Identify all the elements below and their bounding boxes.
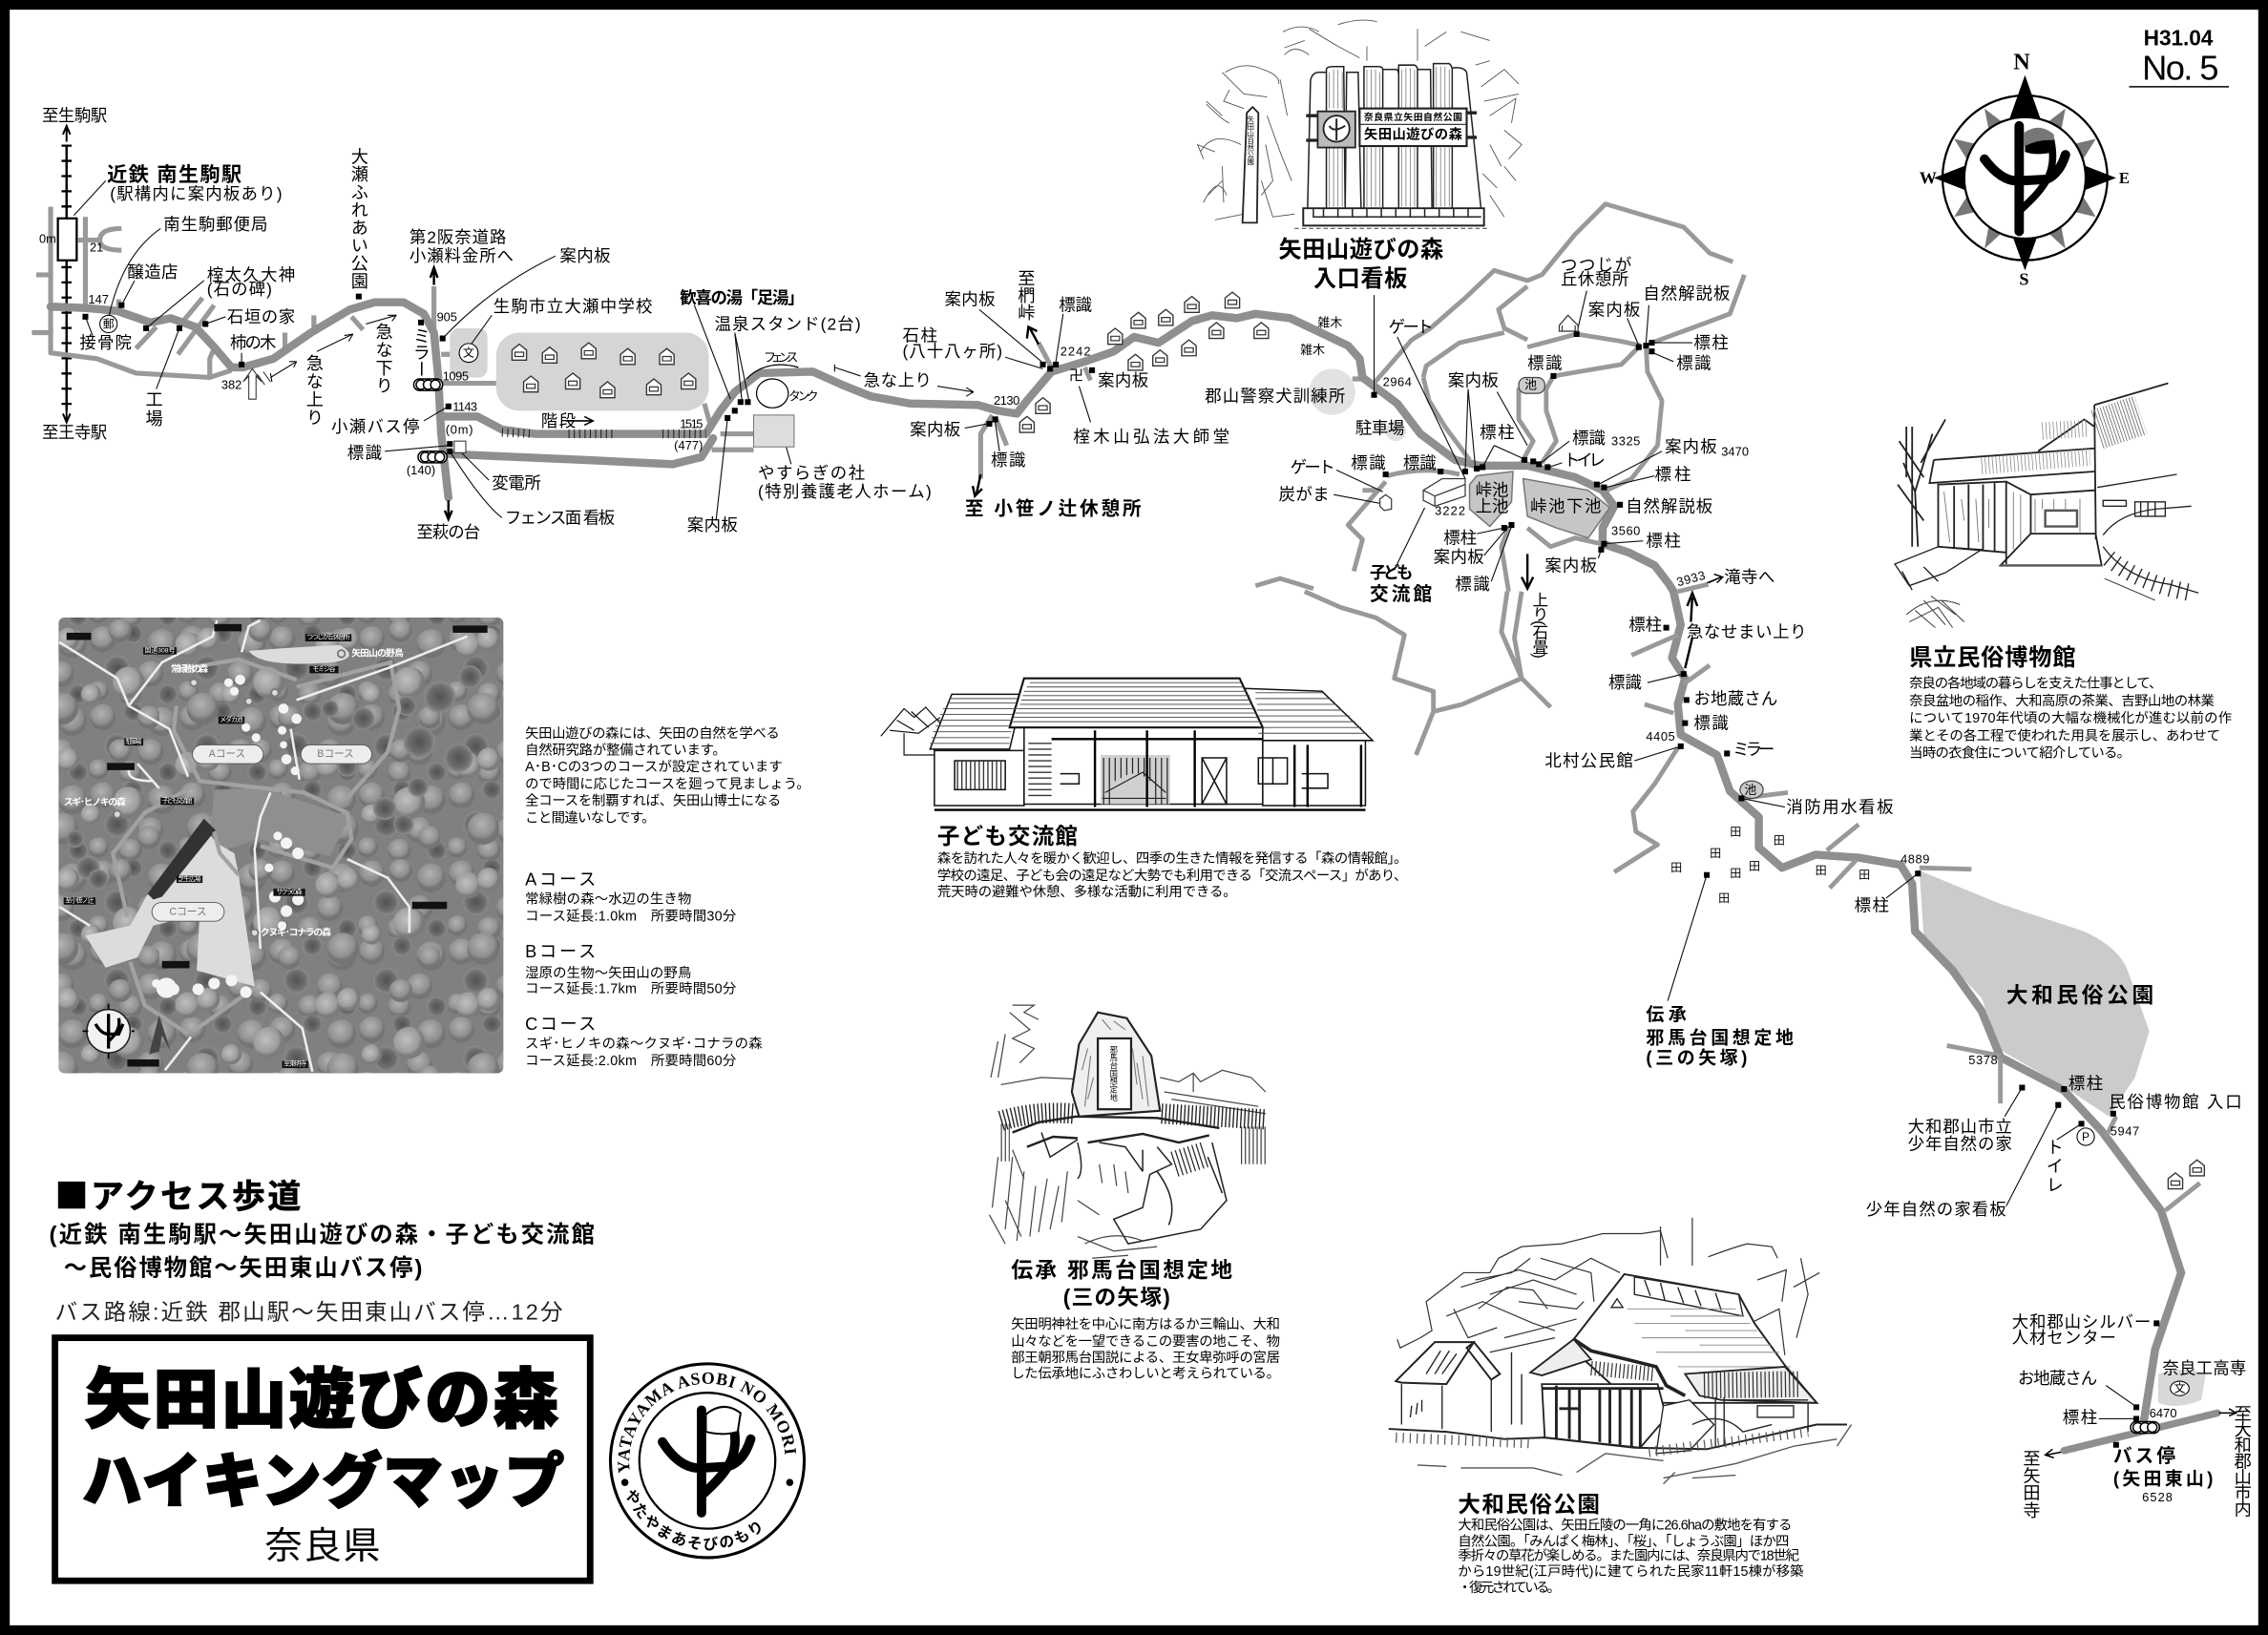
yamato park area bbox=[1920, 870, 2150, 1117]
paddy field symbols: 田 bbox=[1774, 833, 1785, 847]
course map panel: Bコース bbox=[317, 748, 354, 760]
map labels: lake and east section: 伝承 bbox=[1646, 1004, 1687, 1025]
map labels: lake and east section: 標柱 bbox=[1654, 465, 1690, 484]
map labels: west section bbox=[39, 106, 861, 542]
map labels: lake and east section: 3560 bbox=[1611, 524, 1640, 538]
map labels: lake and east section: 大和郡山市立 bbox=[1908, 1117, 2012, 1136]
map labels: lake and east section: 丘休憩所 bbox=[1561, 269, 1628, 288]
course map panel bbox=[58, 618, 503, 1073]
main hiking route bbox=[51, 303, 2217, 1451]
map labels: central section: 雑木 bbox=[1317, 315, 1342, 329]
map labels: west section: 至生駒駅 bbox=[42, 106, 107, 125]
map labels: central section: 標柱 bbox=[1480, 423, 1515, 442]
access route description: (近鉄 南生駒駅〜矢田山遊びの森・子ども交流館 bbox=[50, 1223, 595, 1248]
map labels: central section: 標識 bbox=[1351, 453, 1386, 472]
map labels: central section: 案内板 bbox=[910, 420, 960, 439]
route direction arrows bbox=[270, 267, 2236, 1457]
map labels: lake and east section: 標柱 bbox=[1628, 616, 1662, 635]
compass rose: W bbox=[1920, 168, 1937, 187]
text: forest introduction: A･B･Cの3つのコースが設定されています bbox=[525, 759, 783, 775]
course B: Bコース bbox=[525, 942, 596, 961]
text: Yamatai candidate site: 矢田明神社を中心に南方はるか三輪山、大和 bbox=[1011, 1316, 1280, 1332]
map labels: lake and east section: 標柱 bbox=[1693, 333, 1729, 352]
housing and school blobs bbox=[450, 328, 2206, 1406]
text: forest introduction: 自然研究路が整備されています。 bbox=[525, 742, 726, 758]
map labels: west section: 榁太久大神 bbox=[207, 265, 295, 284]
course map panel: 常緑樹の森 bbox=[171, 662, 208, 675]
map symbol letters bbox=[103, 317, 2186, 1395]
course map panel: メダカ池 bbox=[220, 715, 243, 723]
title box: 矢田山遊びの森 bbox=[85, 1364, 558, 1436]
map labels: west section: 382 bbox=[221, 378, 242, 392]
map labels: lake and east section: 3933 bbox=[1675, 568, 1707, 589]
compass rose: S bbox=[2019, 269, 2028, 288]
map labels: lake and east section: 標柱 bbox=[2063, 1408, 2097, 1427]
map labels: west section: 905 bbox=[437, 309, 457, 324]
text: forest introduction: 全コースを制覇すれば、矢田山博士になる bbox=[525, 792, 781, 808]
map labels: west section: フェンス面 看板 bbox=[505, 508, 615, 527]
course A: Aコース bbox=[525, 870, 596, 889]
text: Yamato folk park: 自然公園。「みんぱく梅林」、「桜」、「しょうぶ園」ほか四 bbox=[1458, 1533, 1789, 1549]
map symbol letters: 郵 bbox=[103, 317, 115, 330]
course B bbox=[525, 942, 737, 996]
paddy field symbols: 田 bbox=[1710, 847, 1721, 860]
text: Yamatai candidate site bbox=[1011, 1316, 1280, 1381]
text: children's exchange hall bbox=[937, 850, 1407, 900]
map labels: lake and east section: トイレ bbox=[1564, 451, 1606, 470]
text: Yamato folk park: 季折々の草花が楽しめる。また園内には、奈良県内で18世紀 bbox=[1458, 1547, 1799, 1563]
course A bbox=[525, 870, 737, 925]
map labels: lake and east section: 標柱 bbox=[1646, 532, 1681, 551]
title box: ハイキングマップ bbox=[82, 1449, 564, 1516]
round logo bbox=[609, 1362, 806, 1560]
map labels: lake and east section: 4405 bbox=[1646, 729, 1675, 744]
map labels: lake and east section: 案内板 bbox=[1665, 437, 1717, 456]
course map panel: 国道308号 bbox=[145, 645, 176, 654]
map labels: west section: 案内板 bbox=[559, 246, 610, 265]
heading: Yamatai candidate site: 伝承 邪馬台国想定地 bbox=[1011, 1257, 1232, 1282]
rest hut and charcoal kiln, shed bbox=[1380, 315, 1578, 511]
paddy field symbols bbox=[1670, 825, 1870, 905]
map labels: lake and east section: バス停 bbox=[2113, 1445, 2175, 1467]
map labels: west section: タンク bbox=[788, 389, 819, 404]
map labels: west section: 急な下り bbox=[374, 323, 393, 395]
text: Yamato folk park: ・復元されている。 bbox=[1458, 1580, 1561, 1596]
course map panel: 駐車場 bbox=[126, 737, 142, 745]
sketch: entrance sign of the forest bbox=[1198, 20, 1522, 228]
map labels: lake and east section: (三の矢塚) bbox=[1646, 1048, 1747, 1069]
text: children's exchange hall: 森を訪れた人々を暖かく歓迎し、四季の生きた情報を発信する「森の情報館」。 bbox=[937, 850, 1407, 867]
map labels: west section: フェンス bbox=[764, 350, 798, 365]
paddy field symbols: 田 bbox=[1749, 860, 1760, 873]
course C: Cコース bbox=[525, 1015, 596, 1034]
text: prefectural folk museum: 奈良盆地の稲作、大和高原の茶業、吉野山地の林業 bbox=[1909, 693, 2215, 709]
map labels: lake and east section: 3470 bbox=[1721, 444, 1749, 458]
map symbols: post, school, parking bbox=[100, 315, 2189, 1395]
map labels: lake and east section: 自然解説板 bbox=[1643, 284, 1730, 304]
map labels: lake and east section: 滝寺へ bbox=[1724, 568, 1774, 587]
map labels: central section: 案内板 bbox=[1448, 371, 1499, 390]
text: children's exchange hall: 学校の遠足、子ども会の遠足など大勢でも利用できる「交流スペース」があり、 bbox=[937, 868, 1407, 884]
map labels: lake and east section bbox=[1524, 255, 2252, 1519]
stair hatching on route bbox=[502, 432, 705, 434]
map labels: central section: 峠池 bbox=[1476, 481, 1508, 500]
course map panel: モミジ谷 bbox=[312, 664, 336, 673]
map labels: west section: 1095 bbox=[443, 368, 469, 383]
pond lower bbox=[1523, 479, 1610, 538]
course A: コース延長:1.0km 所要時間30分 bbox=[525, 909, 737, 925]
map labels: central section: 2130 bbox=[994, 393, 1019, 408]
map labels: west section: 標識 bbox=[347, 443, 382, 462]
text: prefectural folk museum: 奈良の各地域の暮らしを支えた仕事として、 bbox=[1909, 676, 2162, 692]
map labels: central section: 至椚峠 bbox=[1016, 269, 1035, 321]
course map panel: サクラの森 bbox=[276, 887, 303, 895]
map labels: central section: 3222 bbox=[1435, 503, 1465, 517]
map labels: lake and east section: 人材センター bbox=[2012, 1329, 2116, 1348]
map labels: lake and east section: 邪馬台国想定地 bbox=[1646, 1027, 1794, 1048]
heading: Yamato folk park: 大和民俗公園 bbox=[1458, 1492, 1600, 1517]
station building bbox=[58, 219, 76, 261]
map labels: central section: 急な上り bbox=[864, 371, 932, 390]
text: forest introduction bbox=[525, 725, 810, 827]
course map panel: Aコース bbox=[209, 748, 245, 760]
map labels: lake and east section: 至大和郡山市内 bbox=[2233, 1404, 2252, 1518]
map labels: lake and east section: 4889 bbox=[1900, 852, 1929, 867]
map labels: lake and east section: 標識 bbox=[1693, 714, 1729, 733]
map labels: central section: 至 小笹ノ辻休憩所 bbox=[965, 498, 1142, 519]
map labels: lake and east section: トイレ bbox=[2045, 1139, 2064, 1195]
map labels: central section: ゲート bbox=[1389, 317, 1434, 336]
map labels: central section: (八十八ヶ所) bbox=[903, 342, 1002, 361]
map labels: west section: 1515 bbox=[680, 416, 703, 430]
map labels: central section: 案内板 bbox=[1434, 547, 1484, 566]
text: Yamatai candidate site: 部王朝邪馬台国説による、王女卑弥呼の宮居 bbox=[1011, 1350, 1280, 1366]
map labels: lake and east section: 標識 bbox=[1572, 429, 1606, 448]
map labels: lake and east section: 民俗博物館 入口 bbox=[2109, 1093, 2242, 1112]
paddy field symbols: 田 bbox=[1730, 867, 1741, 880]
map labels: lake and east section: 標柱 bbox=[2068, 1074, 2103, 1093]
map labels: central section: 郡山警察犬訓練所 bbox=[1205, 387, 1345, 406]
course C bbox=[525, 1015, 763, 1069]
compass rose bbox=[1920, 50, 2130, 288]
title box: 奈良県 bbox=[264, 1525, 381, 1567]
date and sheet number: H31.04 bbox=[2144, 25, 2214, 50]
map labels: west section: 案内板 bbox=[687, 515, 738, 535]
map labels: central section: 上池 bbox=[1476, 496, 1508, 515]
map labels: west section: 0m bbox=[39, 232, 56, 246]
map labels: west section: 至萩の台 bbox=[416, 523, 480, 542]
map labels: lake and east section: つつじが bbox=[1561, 255, 1631, 274]
course map panel: 子ども交流館 bbox=[162, 796, 193, 805]
map labels: lake and east section: 案内板 bbox=[1544, 555, 1597, 575]
map labels: lake and east section: 6470 bbox=[2150, 1406, 2177, 1420]
map labels: lake and east section: 池 bbox=[1744, 783, 1756, 797]
map labels: central section: 標識 bbox=[991, 451, 1025, 470]
map labels: west section: (0m) bbox=[446, 423, 473, 437]
map labels: lake and east section: 案内板 bbox=[1588, 300, 1640, 319]
map labels: west section: 生駒市立大瀬中学校 bbox=[494, 297, 652, 316]
compass rose: N bbox=[2013, 50, 2030, 75]
map labels: lake and east section: (矢田東山) bbox=[2113, 1469, 2213, 1490]
map labels: west section: ミラー bbox=[411, 326, 430, 377]
access route description: 〜民俗博物館〜矢田東山バス停) bbox=[64, 1255, 422, 1281]
tank bbox=[746, 365, 798, 408]
map labels: central section: 標識 bbox=[1403, 453, 1437, 472]
map labels: west section: 至王寺駅 bbox=[42, 423, 107, 442]
map labels: lake and east section: お地蔵さん bbox=[2018, 1369, 2097, 1388]
map labels: central section: 案内板 bbox=[1098, 371, 1148, 390]
map labels: west section: 南生駒郵便局 bbox=[163, 215, 267, 234]
course map panel: スギ･ヒノキの森 bbox=[64, 795, 126, 807]
compass rose: E bbox=[2119, 169, 2130, 187]
heading: Yamatai candidate site bbox=[1011, 1257, 1232, 1310]
text: Yamato folk park: から19世紀(江戸時代)に建てられた民家11軒15棟が移築 bbox=[1458, 1563, 1804, 1580]
heading: Yamatai candidate site: (三の矢塚) bbox=[1063, 1285, 1170, 1310]
leader lines bbox=[74, 180, 2135, 1418]
map labels: lake and east section: 至矢田寺 bbox=[2021, 1449, 2041, 1519]
map labels: lake and east section: 池 bbox=[1524, 378, 1537, 392]
text: prefectural folk museum bbox=[1909, 676, 2232, 761]
map labels: west section: 急な上り bbox=[304, 354, 324, 427]
text: Yamato folk park bbox=[1458, 1517, 1804, 1596]
map labels: central section: やすらぎの社 bbox=[758, 463, 865, 482]
map labels: central section: 炭がま bbox=[1279, 485, 1330, 504]
map labels: lake and east section: 峠池下池 bbox=[1530, 496, 1601, 515]
access route heading: ■アクセス歩道 bbox=[55, 1171, 301, 1219]
map symbol letters: 文 bbox=[2174, 1382, 2186, 1395]
sketch: monument of Yamatai candidate site: 邪馬台国想定地 bbox=[1109, 1046, 1119, 1101]
heading: children's exchange hall: 子ども交流館 bbox=[937, 824, 1078, 849]
map labels: lake and east section: 少年自然の家看板 bbox=[1866, 1200, 2006, 1219]
text: prefectural folk museum: 業とその各工程で使われた用具を展示し、あわせて bbox=[1909, 727, 2220, 744]
round logo: やたやまあそびのもり bbox=[626, 1489, 761, 1550]
map labels: west section: 近鉄 南生駒駅 bbox=[107, 163, 242, 186]
paddy field symbols: 田 bbox=[1816, 864, 1827, 877]
map labels: west section: 工場 bbox=[144, 390, 163, 429]
course map panel: クヌギ･コナラの森 bbox=[261, 926, 331, 938]
date and sheet number bbox=[2129, 25, 2229, 88]
map labels: central section: 子ども bbox=[1370, 563, 1413, 582]
access route description bbox=[50, 1223, 595, 1281]
course B: コース延長:1.7km 所要時間50分 bbox=[525, 980, 737, 996]
text: forest introduction: こと間違いなしです。 bbox=[525, 810, 655, 827]
bus stop symbols bbox=[413, 379, 2159, 1434]
map labels: lake and east section: 5947 bbox=[2110, 1123, 2139, 1138]
map labels: west section: 柿の木 bbox=[230, 333, 276, 352]
map symbol letters: 文 bbox=[463, 346, 474, 360]
map labels: west section: 1143 bbox=[452, 399, 477, 413]
waypoint markers bbox=[82, 294, 2159, 1448]
map labels: lake and east section: 急なせまい上り bbox=[1687, 622, 1807, 641]
nursing home block bbox=[753, 415, 794, 447]
paddy field symbols: 田 bbox=[1730, 825, 1741, 838]
map labels: lake and east section: 消防用水看板 bbox=[1786, 798, 1894, 817]
map labels: west section: 石垣の家 bbox=[227, 307, 295, 326]
map labels: lake and east section: 大和郡山シルバー bbox=[2012, 1312, 2151, 1331]
map labels: lake and east section: 6528 bbox=[2142, 1490, 2173, 1504]
ponds and forest trails bbox=[1255, 204, 2200, 1210]
map labels: west section: 第2阪奈道路 bbox=[410, 228, 506, 247]
map labels: central section: ゲート bbox=[1291, 457, 1335, 476]
text: forest introduction: 矢田山遊びの森には、矢田の自然を学べる bbox=[525, 725, 780, 742]
map labels: lake and east section: 3325 bbox=[1611, 434, 1640, 449]
paddy field symbols: 田 bbox=[1858, 869, 1870, 882]
sketch: entrance sign of the forest: 矢田山自然公園 bbox=[1247, 115, 1255, 166]
map labels: west section: 変電所 bbox=[492, 473, 541, 493]
map labels: central section: 標識 bbox=[1059, 296, 1092, 315]
map labels: central section: 標柱 bbox=[1443, 529, 1477, 548]
map labels: central section: 矢田山遊びの森 bbox=[1279, 238, 1443, 263]
map labels: west section: 接骨院 bbox=[79, 333, 132, 352]
map labels: central section bbox=[758, 238, 1515, 605]
course map panel: 至小笹ノ辻 bbox=[65, 896, 94, 905]
map labels: west section: (477) bbox=[674, 438, 703, 452]
map labels: central section: 標識 bbox=[1455, 575, 1490, 594]
map labels: west section: 歓喜の湯「足湯」 bbox=[680, 288, 805, 307]
map labels: lake and east section: 標柱 bbox=[1855, 896, 1889, 915]
map labels: west section: 階段 bbox=[541, 411, 576, 430]
map labels: central section: 駐車場 bbox=[1355, 419, 1404, 438]
map labels: west section: (駅構内に案内板あり) bbox=[110, 184, 283, 203]
map labels: central section: 入口看板 bbox=[1313, 266, 1407, 292]
map labels: lake and east section: 奈良工高専 bbox=[2162, 1358, 2246, 1377]
pond small bbox=[1519, 377, 1763, 798]
roads: west section side roads bbox=[32, 207, 1362, 479]
map labels: west section: 大瀬ふれあい公園 bbox=[349, 148, 368, 290]
map labels: lake and east section: ミラー bbox=[1732, 740, 1774, 759]
map labels: west section: (140) bbox=[407, 463, 435, 477]
course map panel: Cコース bbox=[170, 906, 206, 917]
map labels: west section: (石の碑) bbox=[207, 280, 272, 299]
map symbol letters: P bbox=[2082, 1130, 2090, 1143]
map labels: lake and east section: 上り(石畳) bbox=[1530, 591, 1548, 658]
course C: スギ･ヒノキの森〜クヌギ･コナラの森 bbox=[525, 1036, 763, 1052]
map labels: lake and east section: 5378 bbox=[1968, 1053, 1998, 1067]
sketch: entrance sign of the forest: 矢田山遊びの森 bbox=[1364, 126, 1463, 143]
text: prefectural folk museum: について1970年代頃の大幅な機械化が進む以前の作 bbox=[1909, 710, 2232, 726]
map labels: west section: 温泉スタンド(2台) bbox=[715, 314, 861, 333]
map labels: west section: 21 bbox=[90, 241, 103, 255]
text: prefectural folk museum: 当時の衣食住について紹介している。 bbox=[1909, 744, 2131, 761]
map labels: central section: 2242 bbox=[1060, 345, 1091, 359]
paddy field symbols: 田 bbox=[1670, 861, 1682, 874]
paddy field symbols: 田 bbox=[1718, 891, 1730, 905]
sketch: prefectural folk museum bbox=[1895, 384, 2198, 628]
round logo: YATAYAMA ASOBI NO MORI bbox=[618, 1373, 796, 1474]
map labels: central section: 榁木山弘法大師堂 bbox=[1073, 428, 1229, 447]
map labels: central section: 2964 bbox=[1383, 375, 1412, 389]
map labels: central section: 雑木 bbox=[1300, 343, 1325, 357]
map labels: lake and east section: 標識 bbox=[1676, 353, 1712, 372]
sketch: children's exchange hall bbox=[881, 679, 1373, 810]
map labels: central section: 案内板 bbox=[945, 290, 996, 309]
course A: 常緑樹の森〜水辺の生き物 bbox=[525, 891, 691, 907]
sketch: monument of Yamatai candidate site bbox=[989, 1005, 1267, 1258]
map labels: lake and east section: 北村公民館 bbox=[1544, 751, 1633, 770]
map symbol letters: 卍 bbox=[1069, 367, 1083, 384]
course C: コース延長:2.0km 所要時間60分 bbox=[525, 1053, 737, 1069]
map labels: west section: 醸造店 bbox=[127, 262, 178, 282]
map labels: west section: 147 bbox=[88, 292, 109, 306]
sketch: entrance sign of the forest: 奈良県立矢田自然公園 bbox=[1364, 111, 1462, 123]
sketch: Yamato folk park farmhouse bbox=[1389, 1218, 1852, 1484]
course B: 湿原の生物〜矢田山の野鳥 bbox=[525, 965, 691, 981]
text: forest introduction: ので時間に応じたコースを廻って見ましょう。 bbox=[525, 776, 810, 792]
map labels: west section: 小瀬バス停 bbox=[331, 417, 419, 436]
text: Yamato folk park: 大和民俗公園は、矢田丘陵の一角に26.6haの敷地を有する bbox=[1458, 1517, 1792, 1534]
map labels: central section: 石柱 bbox=[903, 326, 937, 346]
heading: prefectural folk museum: 県立民俗博物館 bbox=[1909, 645, 2075, 671]
map labels: central section: 交流館 bbox=[1370, 584, 1432, 605]
text: Yamatai candidate site: した伝承地にふさわしいと考えられている。 bbox=[1011, 1365, 1280, 1381]
map labels: lake and east section: 標識 bbox=[1608, 673, 1642, 692]
map labels: lake and east section: 少年自然の家 bbox=[1908, 1135, 2012, 1154]
course map panel: 至東明寺 bbox=[284, 1059, 306, 1068]
bus route: バス路線:近鉄 郡山駅〜矢田東山バス停…12分 bbox=[55, 1299, 562, 1324]
course map panel: 矢田山の野鳥 bbox=[351, 646, 404, 659]
pond upper bbox=[1470, 472, 1513, 527]
course map panel: つつじが丘休憩所 bbox=[306, 633, 350, 641]
title box bbox=[55, 1338, 590, 1581]
map labels: central section: (特別養護老人ホーム) bbox=[758, 482, 932, 501]
text: children's exchange hall: 荒天時の避難や休憩、多様な活動に利用できる。 bbox=[937, 883, 1237, 900]
transformer box bbox=[454, 441, 466, 452]
map labels: west section: 小瀬料金所へ bbox=[410, 246, 514, 265]
map labels: lake and east section: 大和民俗公園 bbox=[2006, 982, 2153, 1007]
map labels: lake and east section: 標識 bbox=[1527, 353, 1563, 372]
direction arrow near 382 bbox=[243, 368, 270, 399]
map labels: lake and east section: 自然解説板 bbox=[1626, 496, 1712, 515]
map labels: lake and east section: お地蔵さん bbox=[1693, 689, 1777, 708]
course map panel: 芝生広場 bbox=[178, 874, 201, 883]
text: Yamatai candidate site: 山々などを一望できるこの要害の地こそ、物 bbox=[1011, 1333, 1280, 1350]
railway line bbox=[63, 126, 71, 422]
houses bbox=[512, 292, 2204, 1189]
date and sheet number: No. 5 bbox=[2142, 49, 2218, 88]
